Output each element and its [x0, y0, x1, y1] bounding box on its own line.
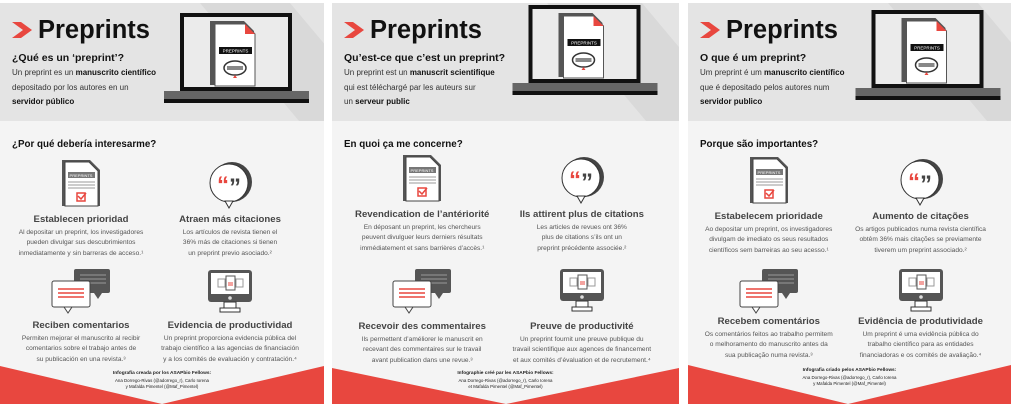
icon: monitor: [899, 269, 943, 312]
credits: y Mafalda Pimentel (@Maf_Pimentel): [126, 384, 198, 389]
item: productivity: trabalho científico para as entidades: [868, 341, 974, 348]
item: comments: Os comentários feitos ao trabalho permitem: [705, 331, 833, 338]
item: citations: Atraen más citaciones: [179, 214, 281, 225]
item: priority: Estabelecem prioridade: [715, 211, 823, 222]
icon: quote bubble: “: [569, 167, 581, 194]
icon: quote bubble: ”: [229, 174, 241, 201]
icon: monitor: [208, 270, 252, 312]
definition text: un serveur public: [344, 97, 410, 106]
item: productivity: travail scientifique aux agences de financement: [513, 346, 651, 353]
item: comments: Recebem comentários: [718, 316, 820, 327]
question heading: Qu’est-ce que c’est un preprint?: [344, 52, 505, 64]
icon: quote bubble: ”: [920, 171, 932, 198]
title: Preprints: [370, 16, 482, 44]
heading: why care: ¿Por qué debería interesarme?: [12, 139, 156, 150]
question heading: ¿Qué es un ‘preprint’?: [12, 52, 124, 64]
item: comments: [22, 320, 140, 363]
item: productivity: Evidencia de productividad: [168, 320, 292, 331]
item: priority: immédiatement et sans barrières d’accès.¹: [360, 245, 484, 252]
item: priority: científicos sem barreiras ao seu acesso.¹: [709, 247, 829, 254]
question heading: O que é um preprint?: [700, 52, 806, 64]
panel: Spanish: [0, 3, 324, 404]
item: productivity: et aux comités d’évaluation et de recrutement.⁴: [513, 357, 651, 364]
icon: quote bubble: “: [908, 169, 920, 196]
item: citations: tiverem um preprint associado.²: [874, 247, 967, 254]
item: priority: [355, 209, 489, 252]
panel: French: [332, 3, 679, 404]
credits: Infografía creada por los ASAPbio Fellows:: [113, 371, 211, 376]
item: priority: divulgam de imediato os seus resultados: [709, 236, 828, 243]
item: citations: Los artículos de revista tienen el: [183, 229, 277, 236]
item: priority: peuvent divulguer leurs derniers résultats: [362, 234, 483, 241]
item: productivity: Un preprint fournit une preuve publique du: [520, 336, 644, 343]
definition text: qui est téléchargé par les auteurs sur: [344, 82, 476, 92]
item: citations: 36% más de citaciones si tienen: [183, 239, 277, 246]
title: Preprints: [726, 16, 838, 44]
item: citations: plus de citations s’ils ont un: [542, 234, 622, 241]
item: priority: Revendication de l’antériorité: [355, 209, 489, 220]
item: comments: Reciben comentarios: [32, 320, 130, 331]
icon: quote bubble: [900, 159, 943, 206]
item: productivity: [512, 321, 652, 364]
icon: document: [62, 160, 100, 206]
definition text: [12, 68, 156, 106]
header band: [688, 3, 1011, 121]
item: comments: avant publication dans une revue.³: [372, 357, 473, 364]
icon: document: [403, 155, 441, 202]
icon: laptop: [512, 5, 658, 95]
icon: document: PREPRINTS: [757, 170, 781, 175]
credits: [802, 368, 897, 386]
item: comments: Ils permettent d’améliorer le manuscrit en: [362, 336, 483, 343]
definition text: [700, 68, 844, 106]
item: comments: Recevoir des commentaires: [358, 321, 486, 332]
footer red band: [688, 365, 1011, 404]
definition text: depositado por los autores en un: [12, 82, 129, 92]
item: citations: Les articles de revues ont 36%: [537, 224, 627, 231]
icon: quote bubble: [210, 162, 252, 209]
item: comments: [705, 316, 833, 359]
item: priority: En déposant un preprint, les chercheurs: [364, 224, 481, 231]
icon: laptop: PREPRINTS: [914, 46, 940, 50]
icon: quote bubble: [562, 157, 604, 204]
item: productivity: Preuve de productivité: [530, 321, 634, 332]
icon: document: [750, 157, 788, 204]
item: productivity: Un preprint proporciona evidencia pública del: [164, 335, 296, 342]
heading: why care: En quoi ça me concerne?: [344, 139, 463, 150]
item: productivity: Um preprint é uma evidência pública do: [862, 331, 979, 338]
icon: laptop: PREPRINTS: [223, 48, 248, 54]
item: productivity: y a los comités de evaluación y contratación.⁴: [163, 356, 297, 363]
item: productivity: financiadoras e os comités de avaliação.⁴: [860, 352, 981, 359]
definition text: Un preprint es un manuscrito científico: [12, 68, 156, 77]
credits: Ana Dorrego-Rivas (@adorrego_r), Carlo Iorena: [458, 378, 553, 382]
item: citations: [855, 211, 986, 254]
header band: [332, 3, 679, 121]
footer red band: [0, 366, 324, 404]
definition text: [344, 68, 495, 106]
item: citations: [179, 214, 281, 257]
title: Preprints: [38, 16, 150, 44]
footer red band: [332, 368, 679, 404]
icon: laptop: PREPRINTS: [571, 40, 597, 46]
definition text: servidor publico: [700, 97, 762, 106]
icon: comments: [52, 269, 110, 314]
item: productivity: [161, 320, 299, 363]
item: productivity: trabajo científico a las agencias de financiación: [161, 345, 299, 352]
icon: laptop: [164, 13, 309, 103]
icon: document: PREPRINTS: [411, 168, 434, 173]
item: priority: pueden divulgar sus descubrimientos: [27, 239, 135, 246]
item: comments: recevant des commentaires sur le travail: [363, 346, 481, 353]
definition text: Un preprint est un manuscrit scientifique: [344, 68, 495, 77]
icon: laptop: [856, 10, 1000, 100]
icon: document: PREPRINTS: [70, 173, 93, 178]
item: productivity: Evidência de produtividade: [858, 316, 983, 327]
item: priority: Establecen prioridad: [34, 214, 128, 225]
icon: quote bubble: “: [217, 172, 229, 199]
item: citations: [520, 209, 644, 252]
item: comments: sua publicação numa revista.³: [725, 352, 813, 359]
credits: Ana Dorrego-Rivas (@adorrego_r), Carlo Iorena: [802, 374, 897, 380]
credits: [113, 370, 211, 389]
item: comments: o melhoramento do manuscrito antes da: [710, 341, 828, 348]
credits: Infographie créé par les ASAPbio Fellows:: [457, 371, 554, 376]
definition text: que é depositado pelos autores num: [700, 82, 829, 92]
header band: [0, 3, 324, 121]
credits: et Mafalda Pimentel (@Maf_Pimentel): [468, 384, 543, 389]
item: citations: un preprint previo asociado.²: [188, 250, 272, 257]
credits: Infografia criado pelos ASAPbio Fellows:: [803, 368, 896, 373]
item: comments: comentarios sobre el trabajo antes de: [26, 345, 136, 352]
icon: monitor: [560, 269, 604, 312]
item: comments: Permiten mejorar el manuscrito al recibir: [22, 335, 140, 342]
definition text: servidor público: [12, 97, 74, 106]
item: citations: Ils attirent plus de citations: [520, 209, 644, 220]
credits: y Mafalda Pimentel (@Maf_Pimentel): [813, 381, 886, 386]
item: priority: [18, 214, 144, 257]
item: priority: [705, 211, 832, 254]
item: priority: inmediatamente y sin barreras de acceso.¹: [19, 250, 143, 257]
heading: why important: Porque são importantes?: [700, 139, 818, 150]
panel: Portuguese: [688, 3, 1011, 404]
item: comments: su publicación en una revista.³: [36, 356, 126, 363]
item: citations: preprint précédente associée.²: [537, 245, 626, 252]
icon: quote bubble: ”: [581, 169, 593, 196]
item: comments: [358, 321, 486, 364]
item: productivity: [858, 316, 983, 359]
icon: comments: [740, 269, 798, 314]
item: citations: obtêm 36% mais citações se previamente: [860, 236, 982, 243]
item: citations: Os artigos publicados numa revista científica: [855, 226, 986, 233]
definition text: Um preprint é um manuscrito científico: [700, 68, 844, 77]
credits: Ana Dorrego-Rivas (@adorrego_r), Carlo Iorena: [115, 378, 209, 382]
credits: [457, 370, 554, 389]
item: priority: Ao depositar um preprint, os investigadores: [705, 226, 832, 233]
item: citations: Aumento de citações: [872, 211, 969, 222]
icon: comments: [392, 269, 451, 314]
item: priority: Al depositar un preprint, los investigadores: [19, 229, 143, 236]
